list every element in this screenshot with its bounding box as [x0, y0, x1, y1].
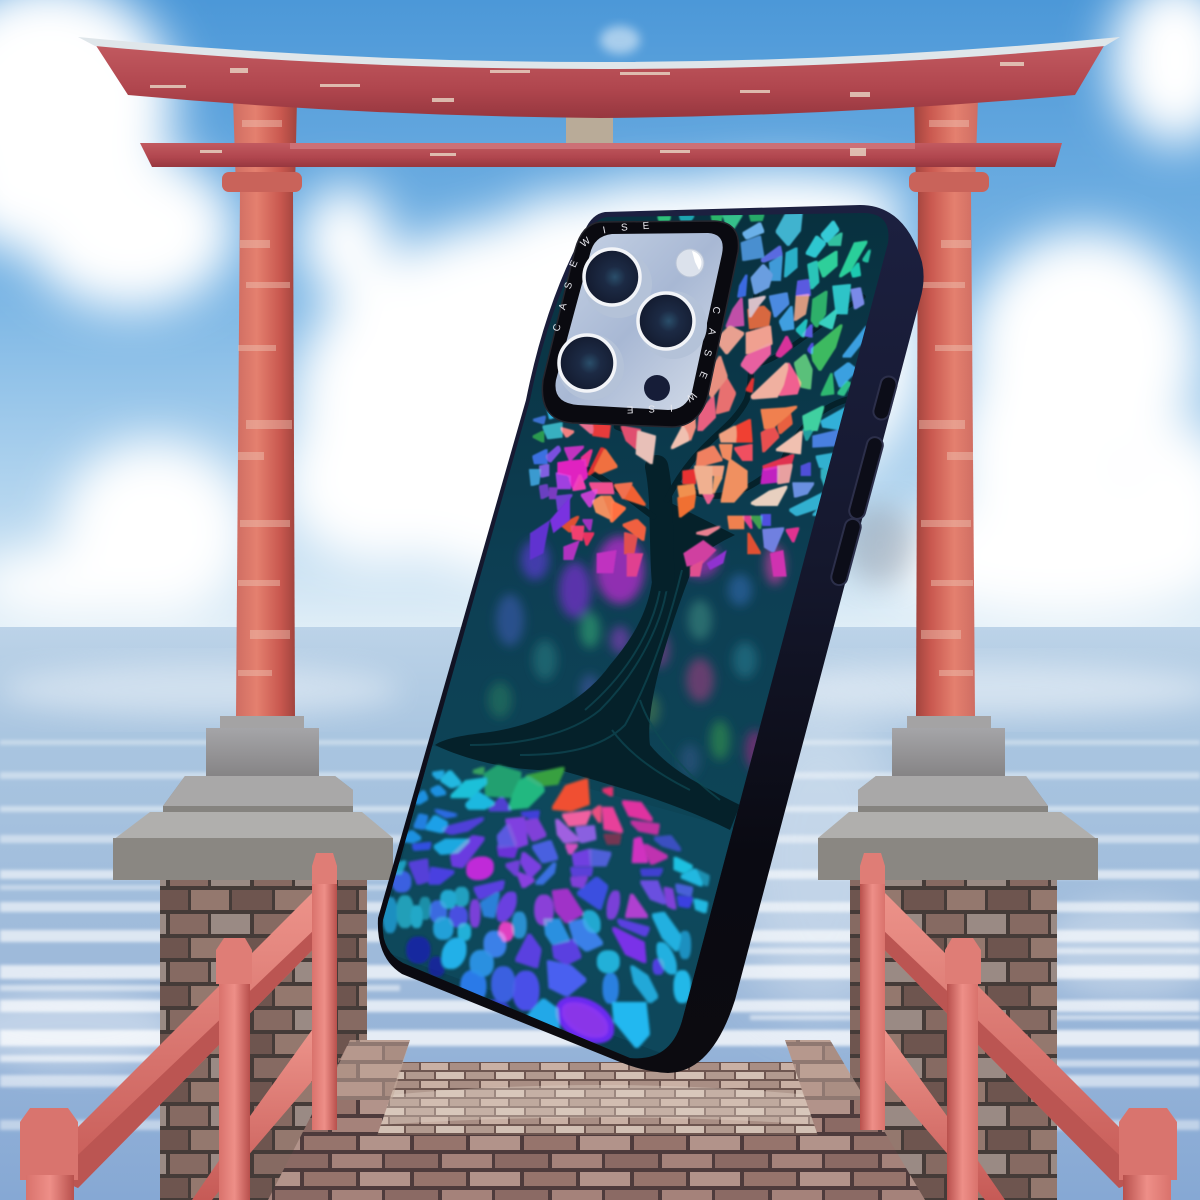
- torii gate right column: [908, 85, 995, 716]
- camera ring: [542, 220, 740, 428]
- left railing: [20, 853, 337, 1200]
- lidar sensor: [644, 375, 670, 401]
- stone walkway floor: [268, 1040, 925, 1200]
- left stone base: [113, 716, 393, 880]
- blurred falling leaves: [488, 536, 785, 776]
- clouds: [0, 0, 1200, 620]
- upper canopy glass panes: [530, 213, 870, 553]
- right stone base: [818, 716, 1098, 880]
- left brick pillar: [160, 880, 367, 1200]
- brand text left: CASEWISE: [553, 222, 650, 331]
- tree branches: [577, 267, 863, 580]
- brand text right: CASEWISE: [627, 307, 720, 414]
- torii gate lintel and top beam: [78, 37, 1120, 167]
- phone case body: [378, 205, 924, 1073]
- sky background: [0, 0, 1200, 630]
- right brick pillar: [850, 880, 1057, 1200]
- root reflection glass panes: [384, 767, 708, 1051]
- phone with case: [378, 205, 924, 1073]
- lenses: [559, 249, 694, 391]
- side buttons: [829, 375, 898, 587]
- tree trunk and roots: [435, 500, 740, 830]
- torii gate left column: [216, 85, 303, 716]
- flash: [676, 249, 704, 277]
- sea: [0, 627, 1200, 1200]
- lens bumps: [558, 250, 707, 400]
- lower canopy blurred panes: [530, 497, 787, 577]
- ground glow: [380, 745, 740, 1060]
- right railing: [860, 853, 1177, 1200]
- stained glass artwork panel: [370, 200, 900, 1070]
- camera plate: [555, 233, 723, 410]
